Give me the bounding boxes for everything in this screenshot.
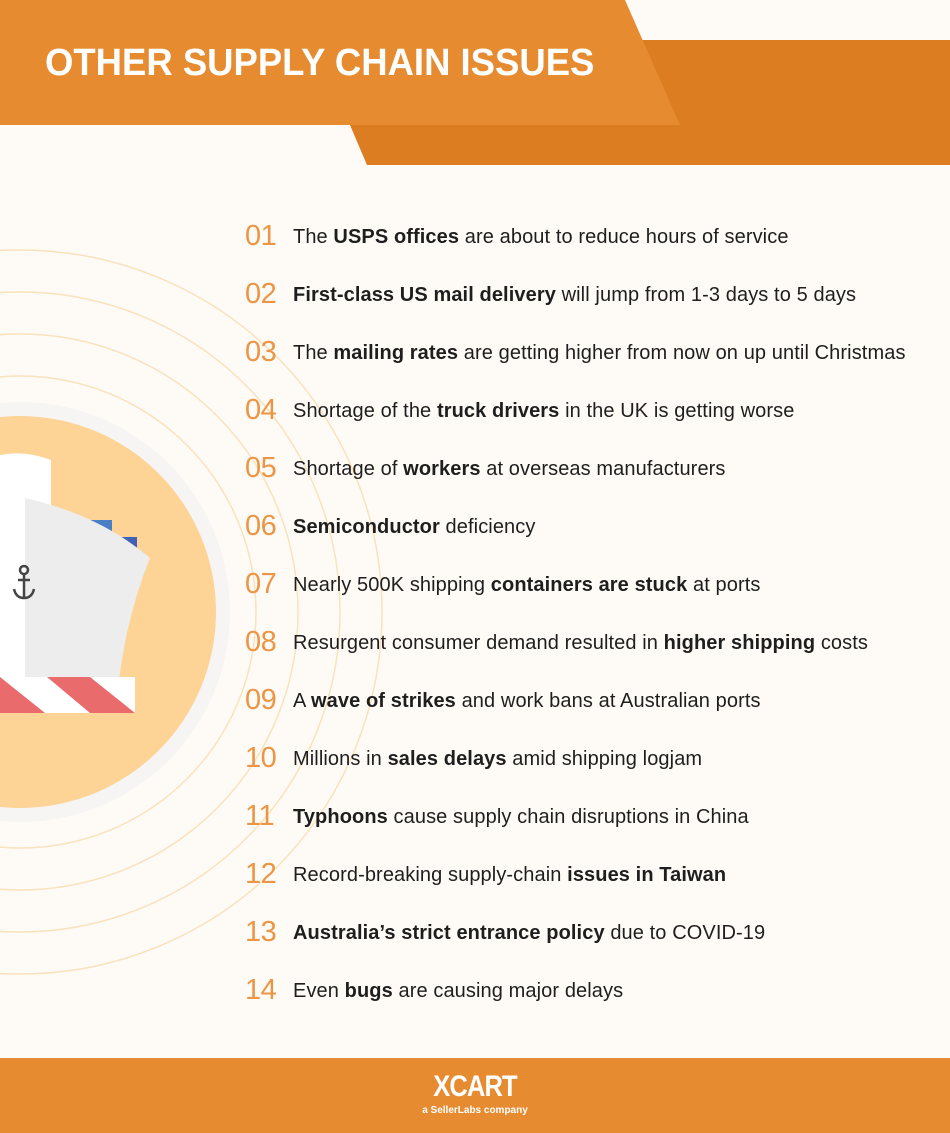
item 12: Record-breaking supply-chain issues in Taiwan (293, 864, 726, 886)
item 11: Typhoons cause supply chain disruptions in China (293, 806, 749, 828)
item 04: 04 (245, 394, 276, 426)
item 02: First-class US mail delivery will jump from 1-3 days to 5 days (293, 284, 856, 306)
item 02: 02 (245, 278, 276, 310)
item 10: Millions in sales delays amid shipping logjam (293, 748, 702, 770)
header banner (0, 0, 950, 165)
item 13: Australia’s strict entrance policy due to COVID-19 (293, 922, 765, 944)
footer (0, 1058, 950, 1133)
item 08 (245, 626, 868, 658)
item 11 (245, 800, 749, 832)
item 11: 11 (245, 800, 274, 832)
item 14: 14 (245, 974, 276, 1006)
item 14: Even bugs are causing major delays (293, 980, 623, 1002)
item 01: The USPS offices are about to reduce hours of service (293, 226, 789, 248)
item 05: 05 (245, 452, 276, 484)
item 09: A wave of strikes and work bans at Australian ports (293, 690, 761, 712)
item 13 (245, 916, 765, 948)
item 06: 06 (245, 510, 276, 542)
item 07: 07 (245, 568, 276, 600)
item 10: 10 (245, 742, 276, 774)
logo (422, 1070, 528, 1116)
item 04: Shortage of the truck drivers in the UK is getting worse (293, 400, 794, 422)
item 01 (245, 220, 789, 252)
item 07 (245, 568, 760, 600)
item 03 (245, 336, 906, 368)
item 14 (245, 974, 623, 1006)
item 05: Shortage of workers at overseas manufacturers (293, 458, 726, 480)
icon: ship (0, 453, 150, 713)
item 02 (245, 278, 856, 310)
item 12: 12 (245, 858, 276, 890)
item 12 (245, 858, 726, 890)
list of issues (245, 220, 906, 1006)
item 03: 03 (245, 336, 276, 368)
item 13: 13 (245, 916, 276, 948)
item 06: Semiconductor deficiency (293, 516, 535, 538)
title: OTHER SUPPLY CHAIN ISSUES (45, 42, 594, 84)
item 09 (245, 684, 761, 716)
logo: a SellerLabs company (422, 1105, 528, 1116)
item 01: 01 (245, 220, 276, 252)
item 03: The mailing rates are getting higher from now on up until Christmas (293, 342, 906, 364)
item 08: Resurgent consumer demand resulted in higher shipping costs (293, 632, 868, 654)
item 07: Nearly 500K shipping containers are stuck at ports (293, 574, 760, 596)
item 04 (245, 394, 794, 426)
item 09: 09 (245, 684, 276, 716)
item 05 (245, 452, 726, 484)
item 08: 08 (245, 626, 276, 658)
item 10 (245, 742, 702, 774)
logo: XCART (433, 1070, 517, 1103)
icon: orange circle (0, 416, 216, 808)
item 06 (245, 510, 536, 542)
